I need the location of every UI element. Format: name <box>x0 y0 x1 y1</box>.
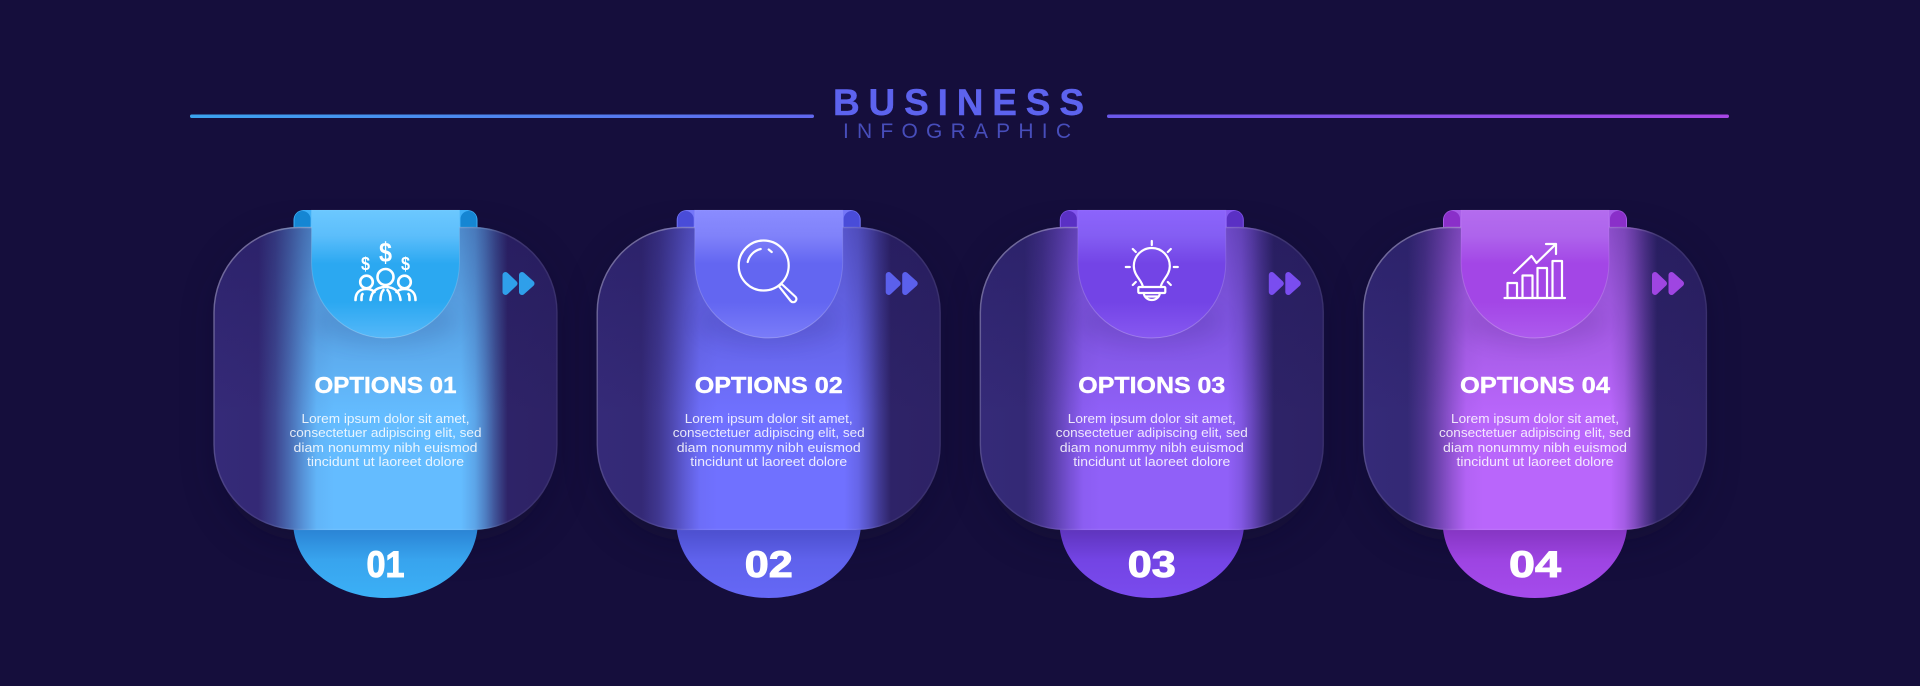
description: tincidunt ut laoreet dolore <box>1073 455 1230 469</box>
top flap <box>294 210 478 240</box>
glass panel <box>214 227 558 530</box>
top flap <box>1060 210 1244 240</box>
title line left <box>190 114 814 118</box>
description: diam nonummy nibh euismod <box>1060 441 1244 455</box>
heading: OPTIONS 02 <box>695 372 843 398</box>
heading: OPTIONS 04 <box>1460 372 1610 398</box>
heading: OPTIONS 01 <box>314 372 457 398</box>
icon: people and money: $ <box>401 254 410 274</box>
title: business: BUSINESS <box>833 82 1084 123</box>
description: Lorem ipsum dolor sit amet, <box>685 412 853 426</box>
icon: double arrow <box>506 275 532 292</box>
glass panel <box>597 227 941 530</box>
number: 03 <box>1128 544 1176 585</box>
glass panel <box>980 227 1324 530</box>
icon: people and money: $ <box>361 254 370 274</box>
header tab <box>312 210 460 338</box>
bottom number tab <box>1060 529 1244 598</box>
bottom number tab <box>294 529 478 598</box>
description: consectetuer adipiscing elit, sed <box>290 426 482 440</box>
description: diam nonummy nibh euismod <box>294 441 478 455</box>
card 3 <box>980 210 1324 598</box>
number: 04 <box>1509 544 1562 585</box>
top flap <box>1443 210 1627 240</box>
header tab <box>1078 210 1226 338</box>
description: diam nonummy nibh euismod <box>1443 441 1627 455</box>
subtitle: infographic: INFOGRAPHIC <box>843 120 1071 143</box>
icon: double arrow <box>1655 275 1681 292</box>
description: tincidunt ut laoreet dolore <box>1456 455 1614 469</box>
description <box>290 412 482 469</box>
description: Lorem ipsum dolor sit amet, <box>1068 412 1236 426</box>
bottom number tab <box>677 529 861 598</box>
title line right <box>1107 114 1729 118</box>
card 2 <box>597 210 941 598</box>
card 1 <box>214 210 558 598</box>
heading: OPTIONS 03 <box>1078 372 1225 398</box>
description: tincidunt ut laoreet dolore <box>307 455 464 469</box>
icon: double arrow <box>1272 275 1298 292</box>
glass panel <box>1363 227 1707 530</box>
description <box>673 412 865 469</box>
description: consectetuer adipiscing elit, sed <box>673 426 865 440</box>
icon: growth chart <box>1504 244 1565 298</box>
number: 01 <box>366 544 404 585</box>
description: diam nonummy nibh euismod <box>677 441 861 455</box>
description: consectetuer adipiscing elit, sed <box>1056 426 1248 440</box>
card 4 <box>1363 210 1707 598</box>
header <box>190 82 1729 143</box>
icon: double arrow <box>889 275 915 292</box>
description: Lorem ipsum dolor sit amet, <box>302 412 470 426</box>
top flap <box>677 210 861 240</box>
icon: magnifier <box>739 240 796 302</box>
number: 02 <box>745 544 793 585</box>
description: tincidunt ut laoreet dolore <box>690 455 847 469</box>
description <box>1056 412 1248 469</box>
icon: people and money: $ <box>379 237 392 268</box>
bottom number tab <box>1443 529 1627 598</box>
header tab <box>1461 210 1609 338</box>
description <box>1439 412 1631 469</box>
icon: people and money <box>356 237 416 300</box>
description: consectetuer adipiscing elit, sed <box>1439 426 1631 440</box>
header tab <box>695 210 843 338</box>
icon: light bulb <box>1126 241 1178 300</box>
description: Lorem ipsum dolor sit amet, <box>1451 412 1619 426</box>
